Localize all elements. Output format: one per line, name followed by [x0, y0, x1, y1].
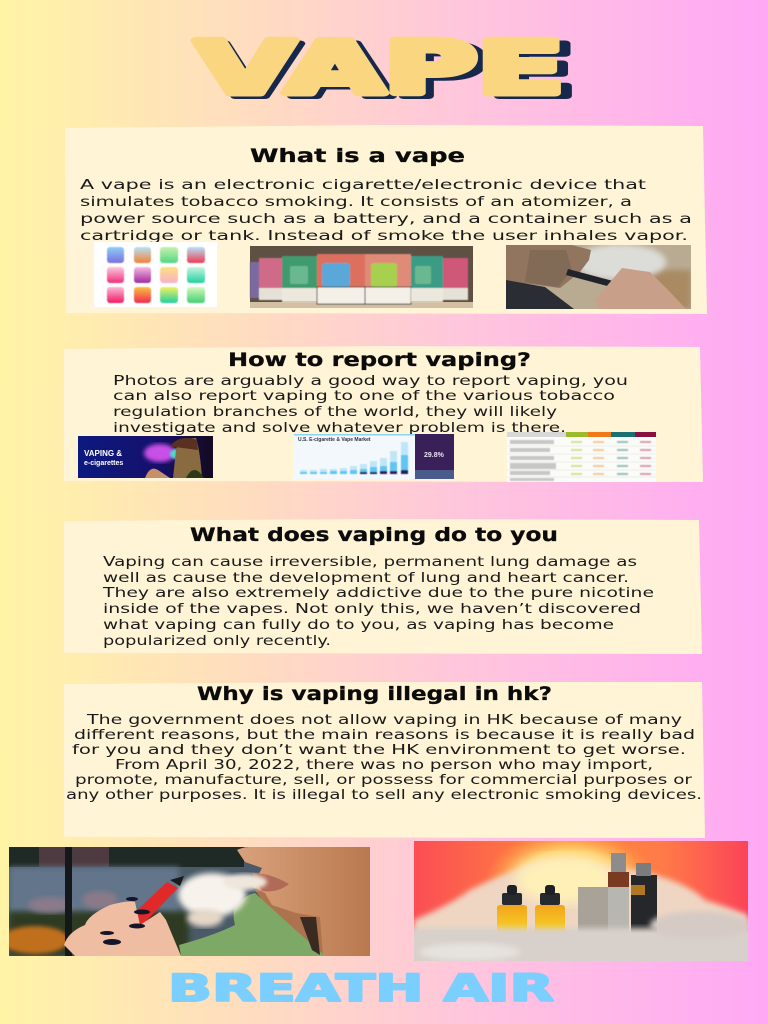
text block: how to report: investigate and solve whatever problem is there. — [113, 420, 566, 436]
image: grid of colourful disposable vapes — [94, 242, 217, 307]
text block: health effects — [102, 554, 654, 649]
slogan: breath air: BREATH AIR — [168, 967, 554, 1010]
chart: e-cigarette and vape market: U.S. E-cigarette & Vape Market — [298, 437, 371, 443]
image: Lost Mary vape boxes — [250, 246, 473, 308]
text block: hong kong law: promote, manufacture, sell, or possess for commercial purposes or — [75, 772, 693, 788]
image: vape devices and bottles in clouds — [414, 841, 748, 961]
text block: health effects: popularized only recently. — [103, 633, 331, 649]
text block: vape definition: cartridge or tank. Instead of smoke the user inhales vapor. — [80, 228, 688, 244]
image: woman exhaling vape smoke — [1, 847, 370, 956]
text block: health effects: Vaping can cause irreversible, permanent lung damage as — [103, 554, 637, 570]
text block: how to report — [113, 373, 628, 436]
title: VAPE — [196, 26, 564, 110]
face — [237, 847, 370, 956]
chart: e-cigarette and vape market: 29.8% — [424, 452, 445, 459]
text block: health effects: what vaping can fully do to you, as vaping has become — [103, 617, 614, 633]
text block: vape definition: power source such as a battery, and a container such as a — [80, 211, 692, 227]
heading: how to report vaping: How to report vaping? — [228, 349, 531, 371]
text block: hong kong law: The government does not allow vaping in HK because of many — [86, 712, 682, 728]
image: man exhaling vapor — [506, 244, 691, 309]
neck — [255, 890, 323, 954]
mods — [578, 853, 657, 933]
hand — [64, 901, 181, 956]
bottles — [497, 885, 565, 933]
smoke — [178, 873, 246, 917]
title — [196, 26, 576, 113]
panel: what does vaping do to you — [64, 519, 702, 654]
jacket — [179, 893, 325, 956]
text block: vape definition: simulates tobacco smoking. It consists of an atomizer, a — [80, 194, 632, 210]
text block: how to report: can also report vaping to one of the various tobacco — [113, 388, 615, 404]
text block: vape definition — [80, 177, 692, 244]
text block: hong kong law: From April 30, 2022, there was no person who may import, — [115, 757, 653, 773]
panel: how to report vaping — [64, 346, 703, 482]
image: vaping and e-cigarettes banner — [78, 436, 213, 478]
heading: why is vaping illegal in hk: Why is vaping illegal in hk? — [197, 683, 552, 705]
chart: e-cigarette and vape market — [294, 434, 454, 479]
heading: what does vaping do to you: What does vaping do to you — [190, 524, 558, 546]
vape device — [138, 882, 178, 924]
cloud — [414, 924, 748, 961]
text block: hong kong law: different reasons, but the main reasons is because it is really bad — [74, 727, 695, 743]
image: vaping and e-cigarettes banner: VAPING & — [84, 449, 122, 458]
text block: hong kong law: for you and they don’t want the HK environment to get worse. — [72, 742, 686, 758]
title: VAPE — [200, 29, 576, 113]
text block: vape definition: A vape is an electronic cigarette/electronic device that — [80, 177, 646, 193]
stacked bars — [300, 442, 408, 474]
heading: what is a vape: What is a vape — [250, 145, 465, 167]
panel: why is vaping illegal in hk — [64, 682, 705, 838]
text block: hong kong law: any other purposes. It is illegal to sell any electronic smoking devices. — [66, 787, 702, 803]
text block: how to report: Photos are arguably a good way to report vaping, you — [113, 373, 628, 389]
table: vape comparison — [507, 432, 656, 482]
text block: how to report: regulation branches of the world, they will likely — [113, 404, 557, 420]
text block: hong kong law — [66, 712, 702, 803]
panel: what is a vape — [65, 125, 707, 314]
text block: health effects: inside of the vapes. Not only this, we haven’t discovered — [103, 601, 641, 617]
text block: health effects: well as cause the development of lung and heart cancer. — [103, 570, 629, 586]
text block: health effects: They are also extremely addictive due to the pure nicotine — [102, 585, 654, 601]
image: vaping and e-cigarettes banner: e-cigarettes — [84, 460, 123, 467]
